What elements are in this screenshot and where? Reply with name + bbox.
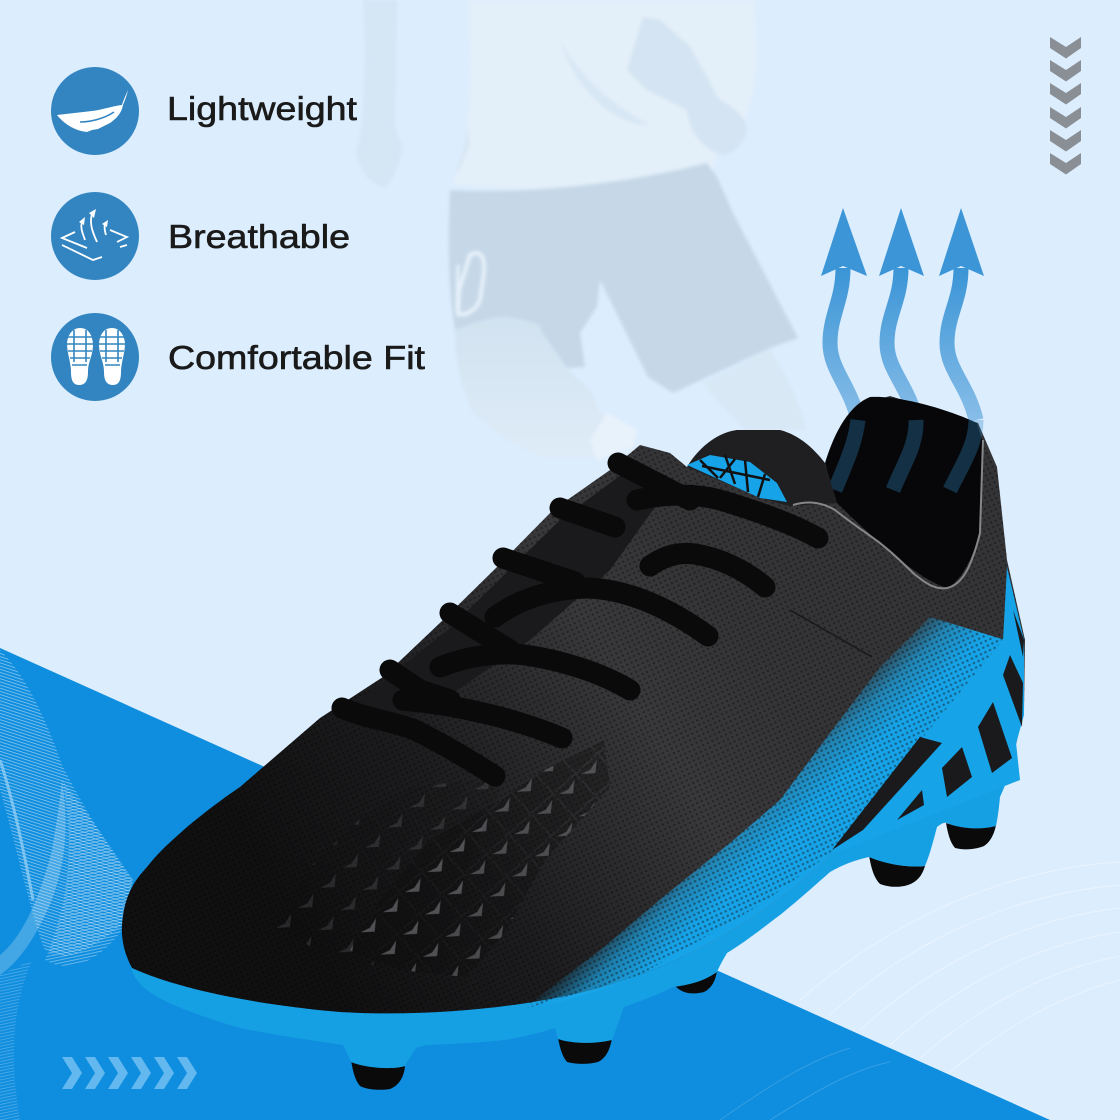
top-right chevrons [1050, 37, 1081, 174]
front stud 1 tip [351, 1060, 405, 1090]
toe diamond texture faint [276, 777, 505, 967]
heel seam line [793, 440, 983, 588]
shorts number [457, 253, 484, 314]
toe diamond texture strong [350, 740, 610, 977]
arrow 3 [939, 208, 984, 420]
player left arm [357, 0, 403, 188]
faded football player [357, 0, 807, 460]
blue diagonal panel [0, 648, 1050, 1120]
feature icon: soles [51, 313, 139, 401]
label: Breathable: Breathable [168, 218, 350, 255]
front stud 2 tip [558, 1038, 612, 1064]
upper body [122, 396, 1025, 1013]
player sock [590, 413, 637, 460]
heel cage blue [830, 567, 1024, 852]
decorative wave lines bottom right [720, 862, 1120, 1120]
heel cage black strips [832, 610, 1024, 850]
airflow arrows behind shoe [821, 208, 984, 420]
rear stud 2 tip [946, 823, 996, 849]
tongue [687, 430, 837, 506]
halftone blue band [521, 617, 1020, 1010]
player shorts [449, 163, 798, 393]
lace throat strip [345, 472, 660, 722]
arrow 2 [879, 208, 924, 420]
player shirt [453, 0, 757, 190]
sole and studs [130, 760, 1012, 1068]
airflow over collar [835, 420, 976, 490]
bottom-left chevrons [62, 1057, 197, 1089]
laces [342, 463, 818, 776]
football boot [120, 390, 1030, 1090]
label: Lightweight: Lightweight [167, 90, 357, 127]
rear stud 1 tip [869, 855, 925, 887]
player raised hand and forearm [627, 17, 747, 155]
arrow 1 [821, 208, 867, 420]
decorative wave mesh left [0, 650, 133, 1120]
tongue logo [687, 455, 787, 502]
band dot texture [521, 617, 1003, 1010]
upper dot texture [120, 390, 1030, 1030]
player knee and thigh [455, 317, 637, 457]
collar opening [825, 397, 983, 588]
front stud 3 tip [672, 970, 717, 993]
feature icon: feather [51, 67, 139, 155]
label: Comfortable Fit: Comfortable Fit [168, 339, 425, 376]
side crease [790, 610, 872, 657]
feature icon: breathable [51, 192, 139, 280]
shirt folds [456, 40, 650, 172]
player other leg [703, 348, 807, 430]
